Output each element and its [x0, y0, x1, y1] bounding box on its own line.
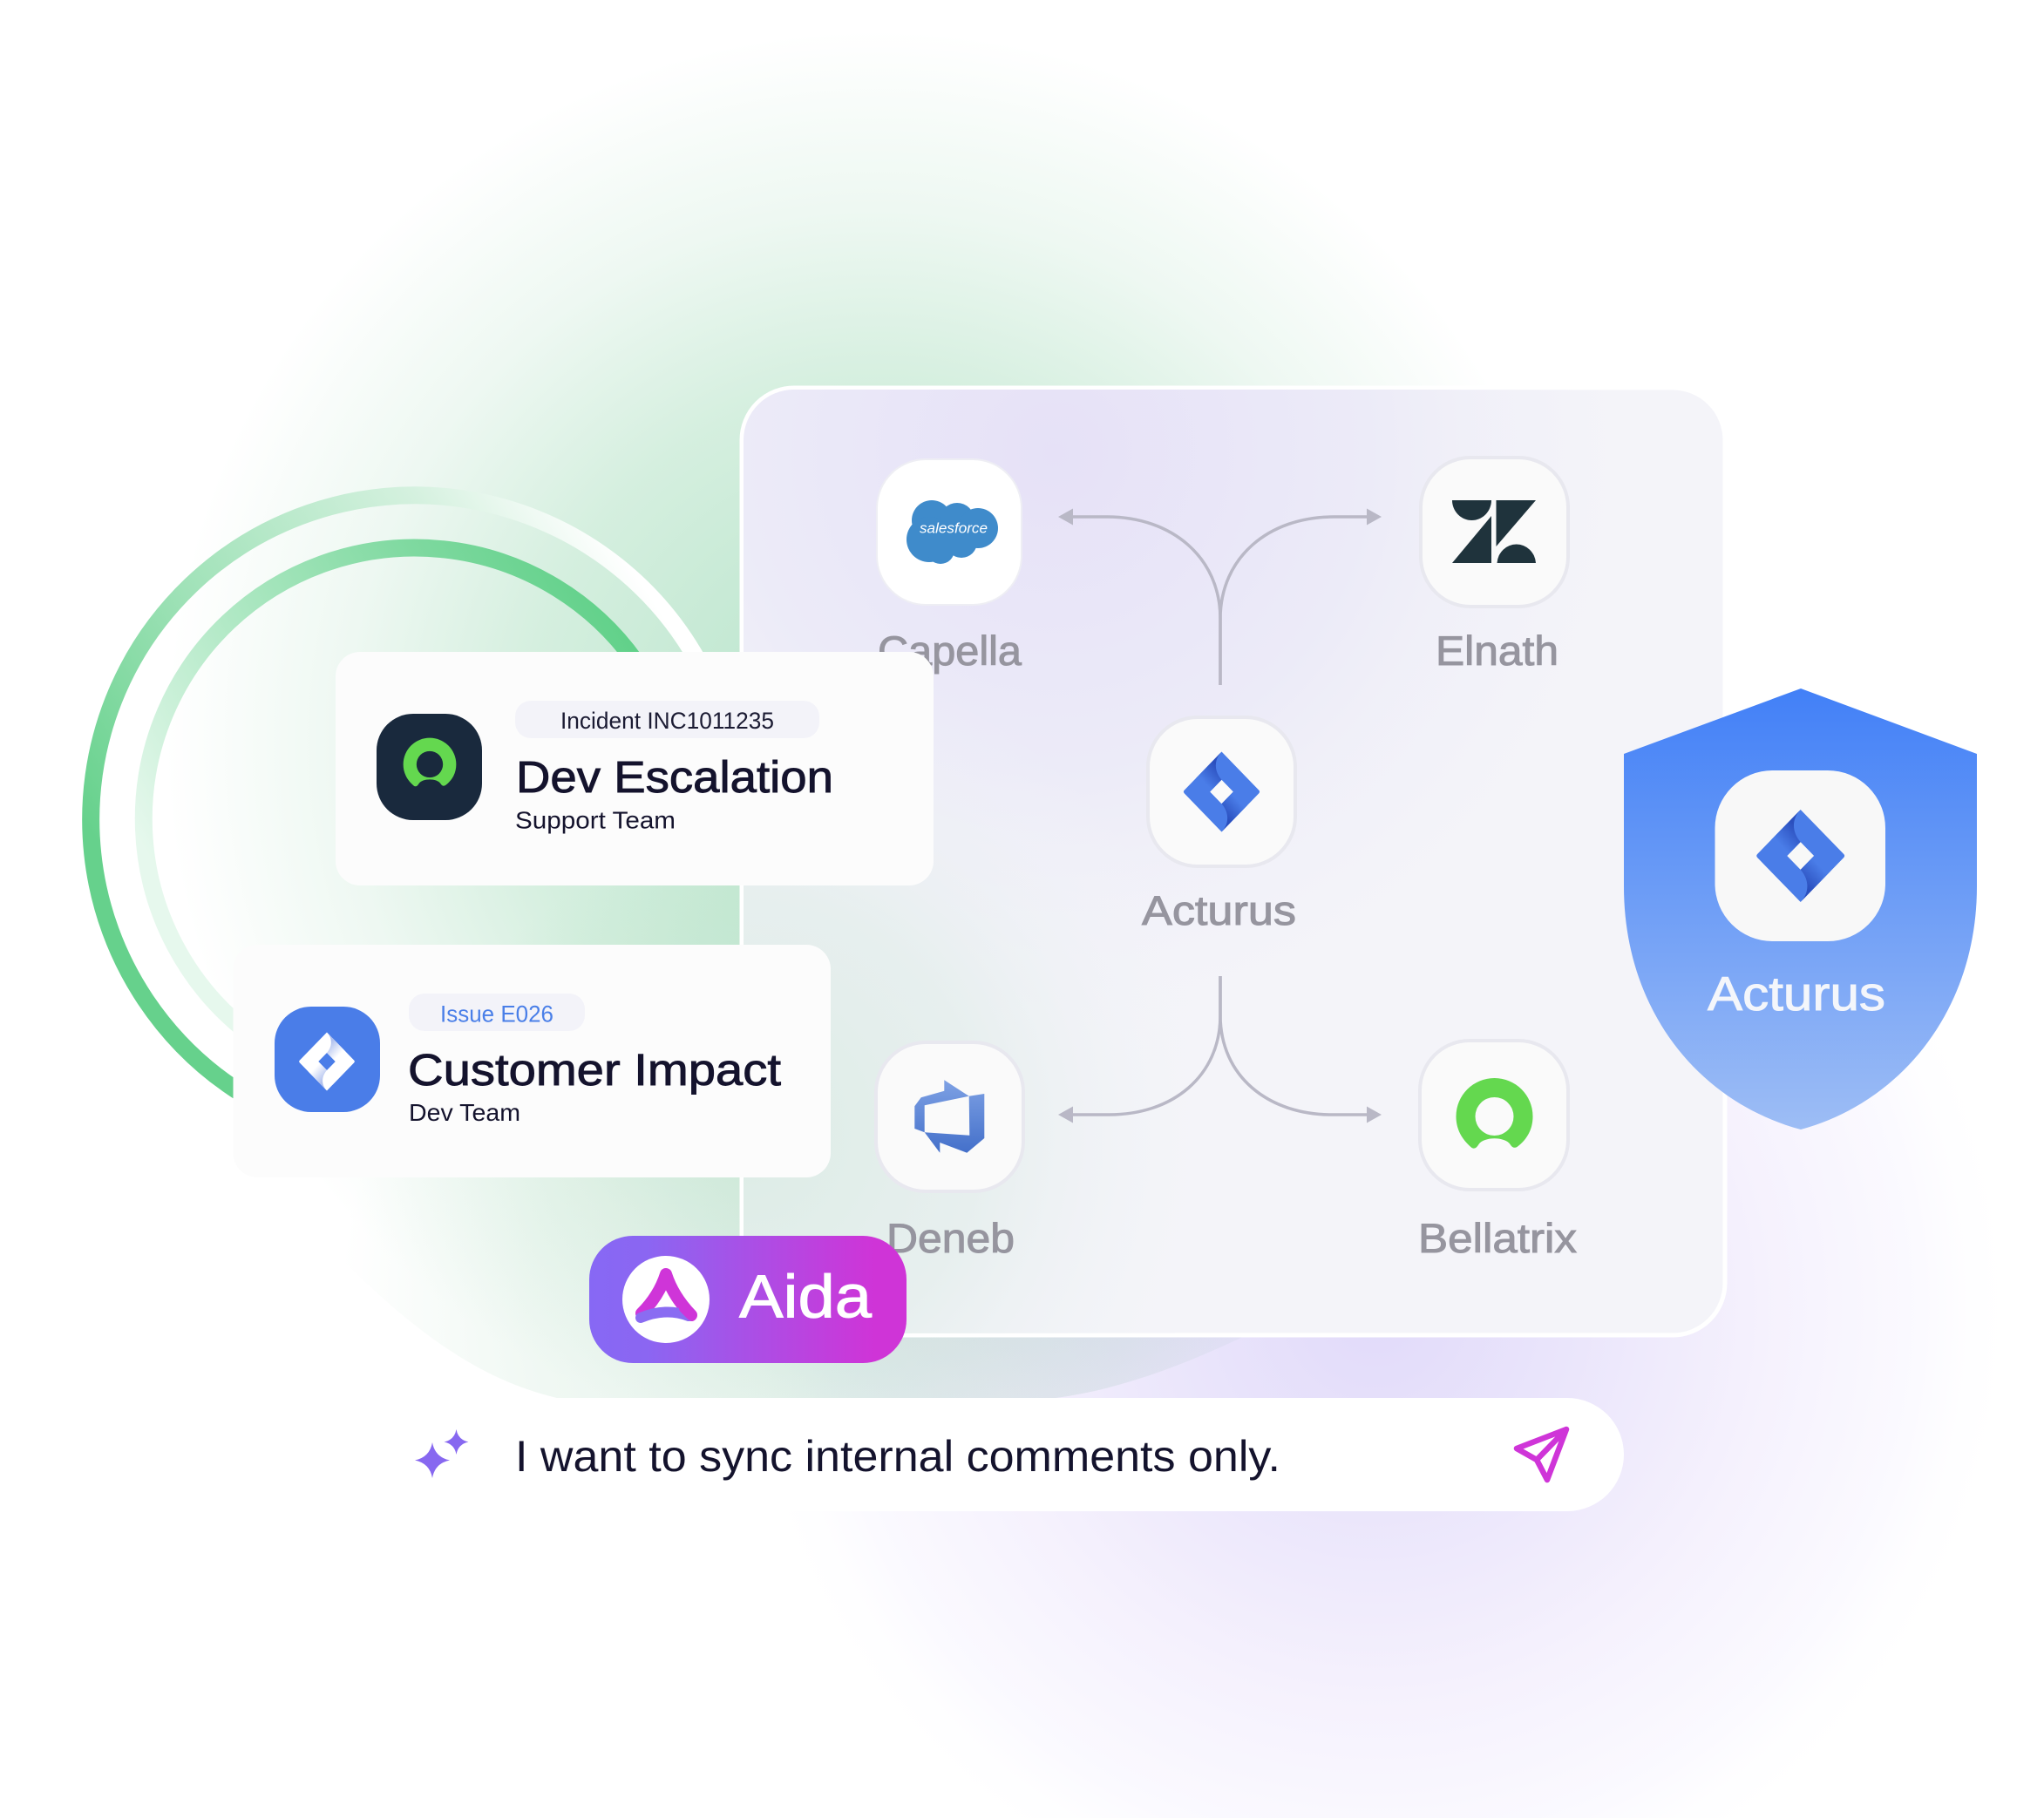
icon: jira blue tile: [275, 1007, 380, 1112]
background glow: green: [249, 114, 1391, 1398]
card: Dev Escalation: [336, 652, 934, 885]
heading: Dev Escalation: Dev Escalation: [516, 752, 833, 802]
text: prompt: I want to sync internal comments only.: [515, 1432, 1280, 1481]
node: Acturus (jira): Acturus: [1142, 887, 1296, 933]
shield: Acturus: Acturus: [1708, 967, 1885, 1021]
decorative ring: inner: [144, 548, 635, 1030]
node: Elnath (zendesk): Elnath: [1436, 627, 1558, 674]
node: Bellatrix (freshservice): [1418, 1041, 1577, 1261]
pill: incident number: [515, 701, 819, 738]
icon: sparkles: [415, 1429, 469, 1478]
node: Deneb (azure devops): Deneb: [886, 1215, 1015, 1261]
node: Bellatrix (freshservice): Bellatrix: [1418, 1215, 1577, 1261]
node: Acturus (jira): [1142, 717, 1296, 933]
node: Capella (salesforce): Capella: [878, 627, 1022, 674]
pill: issue number: Issue E026: [440, 1001, 553, 1027]
icon: Aida logo: [622, 1256, 710, 1343]
arrows: top fork: [1058, 509, 1382, 685]
text: Support Team: Support Team: [515, 807, 676, 833]
node: Deneb (azure devops): [876, 1042, 1023, 1261]
pill: incident number: Incident INC1011235: [560, 708, 774, 734]
text: Dev Team: Dev Team: [409, 1099, 520, 1126]
shield: Acturus: [1624, 689, 1977, 1129]
badge: Aida: Aida: [739, 1262, 872, 1330]
background glow: purple: [697, 610, 2044, 1818]
node: Elnath (zendesk): [1421, 458, 1568, 674]
chat input bar: [349, 1398, 1624, 1511]
arrows: bottom fork: [1058, 976, 1382, 1123]
badge: Aida: [589, 1236, 907, 1363]
icon: freshservice dark tile: [377, 714, 482, 820]
heading: Customer Impact: Customer Impact: [408, 1045, 781, 1095]
decorative ring: outer: [91, 495, 698, 1096]
pill: issue number: [409, 994, 585, 1031]
icon: send: [1517, 1429, 1566, 1480]
panel: connected tools: [742, 388, 1725, 1335]
node: Capella (salesforce): [877, 459, 1022, 674]
node: Capella (salesforce): salesforce: [920, 521, 988, 537]
card: Customer Impact: [234, 945, 831, 1177]
